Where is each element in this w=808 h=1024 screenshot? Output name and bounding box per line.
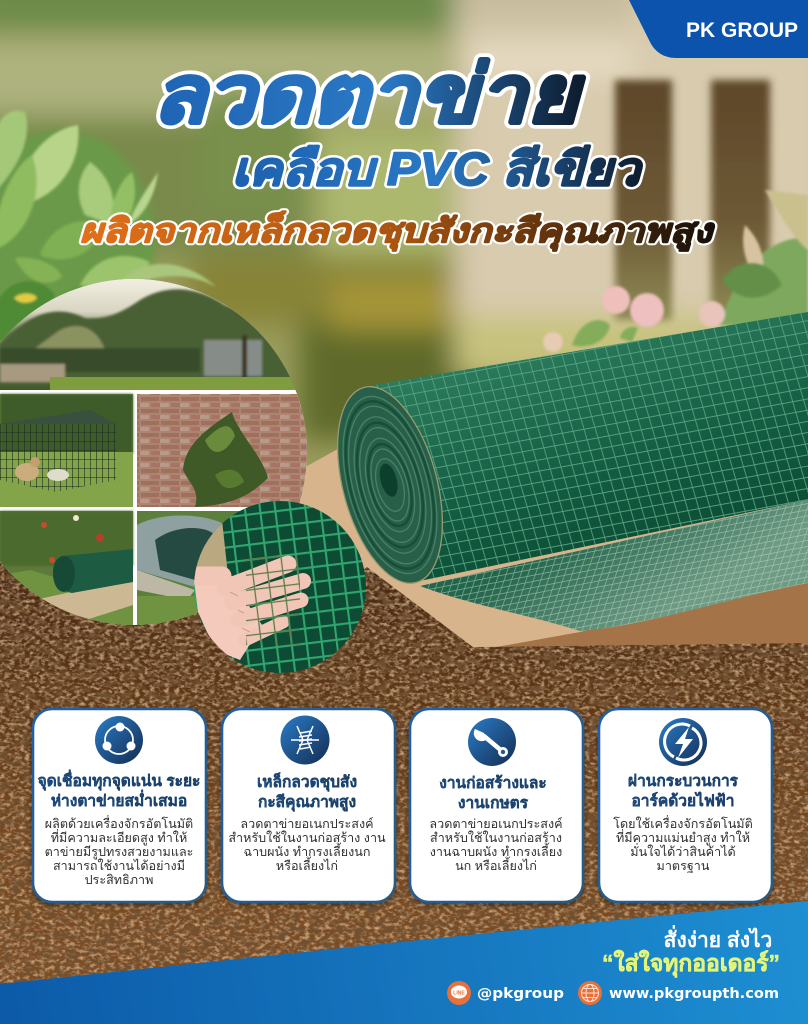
wooden table under roll <box>300 420 808 650</box>
soil ground <box>0 560 808 1024</box>
icon: three linked nodes <box>95 716 143 764</box>
website: www.pkgroupth.com <box>609 986 779 1002</box>
green mesh roll <box>318 312 808 631</box>
brand tab: PK GROUP: PK GROUP <box>686 18 798 42</box>
slogan highlight: “ใส่ใจทุกออเดอร์” <box>602 949 780 978</box>
photo collage circle <box>0 275 325 635</box>
body text: สามารถใช้งานได้อย่างมี <box>53 859 185 873</box>
heading: ผ่านกระบวนการ <box>628 773 739 790</box>
footer blue band <box>0 901 808 1024</box>
icon: line <box>447 981 471 1005</box>
icon: wrench <box>468 718 516 766</box>
body text: งานฉาบผนัง ทำกรงเลี้ยง <box>430 842 562 859</box>
heading: งานก่อสร้างและ <box>439 774 547 792</box>
photo: hand holding green mesh <box>190 498 372 678</box>
title line 2: เคลือบ PVC สีเขียว <box>232 143 643 195</box>
title <box>80 50 715 252</box>
rolled out mesh sheet <box>420 500 808 631</box>
roll spiral end <box>318 375 462 595</box>
body text: ลวดตาข่ายอเนกประสงค์ <box>429 817 563 831</box>
heading: งานเกษตร <box>458 795 529 812</box>
icon: line: LINE <box>453 990 465 996</box>
body text: ที่มีความแม่นยำสูง ทำให้ <box>616 829 750 846</box>
heading: กะสีคุณภาพสูง <box>258 793 356 813</box>
background: blurred garden and house <box>0 0 808 700</box>
card 4: electric arc process <box>599 709 772 902</box>
card 3: construction and farming <box>410 709 583 902</box>
body text: ที่มีความละเอียดสูง ทำให้ <box>51 829 187 846</box>
photo: garden pond with stones <box>137 511 240 625</box>
line handle: @pkgroup <box>477 986 564 1002</box>
title line 1: ลวดตาข่าย <box>152 50 585 139</box>
decorative foliage and flowers right <box>543 190 808 352</box>
card 2: galvanized wire <box>222 709 395 902</box>
subtitle: ผลิตจากเหล็กลวดชุบสังกะสีคุณภาพสูง <box>80 210 715 252</box>
body text: โดยใช้เครื่องจักรอัตโนมัติ <box>613 815 753 831</box>
photo: garden and shed <box>0 278 310 390</box>
photo: garden bed with green roll on pallet <box>0 511 133 625</box>
photo: brick wall with climbing plant <box>137 394 309 507</box>
heading: จุดเชื่อมทุกจุดแน่น ระยะ <box>38 769 200 791</box>
slogan: สั่งง่าย ส่งไว <box>664 924 772 952</box>
icon: lightning bolt <box>659 718 707 766</box>
subtitle: ผลิตจากเหล็กลวดชุบสังกะสีคุณภาพสูง <box>80 210 715 252</box>
body text: ผลิตด้วยเครื่องจักรอัตโนมัติ <box>45 815 193 831</box>
body text: มาตรฐาน <box>657 859 710 873</box>
body text: มั่นใจได้ว่าสินค้าได้ <box>630 843 736 859</box>
body text: ประสิทธิภาพ <box>85 873 153 887</box>
title line 2: เคลือบ PVC สีเขียว <box>232 143 643 195</box>
body text: สำหรับใช้ในงานก่อสร้าง <box>430 831 562 845</box>
hand <box>194 564 303 660</box>
heading: เหล็กลวดชุบสัง <box>257 771 357 792</box>
body text: หรือเลี้ยงไก่ <box>276 856 338 873</box>
heading: ห่างตาข่ายสม่ำเสมอ <box>51 789 187 810</box>
roll body <box>363 312 808 583</box>
body text: ตาข่ายมีรูปทรงสวยงามและ <box>45 845 193 860</box>
icon: barbed wire <box>280 716 330 764</box>
body text: ลวดตาข่ายอเนกประสงค์ <box>240 817 374 831</box>
card 1: welded joints <box>33 709 206 902</box>
decorative foliage left <box>0 111 216 350</box>
photo: dog and rabbit in green fence run <box>0 394 133 507</box>
brand tab: PK GROUP <box>629 0 808 58</box>
title line 1: ลวดตาข่าย <box>152 50 585 139</box>
body text: ฉาบผนัง ทำกรงเลี้ยงนก <box>244 842 370 859</box>
body text: นก หรือเลี้ยงไก่ <box>455 856 537 873</box>
body text: สำหรับใช้ในงานก่อสร้าง งาน <box>228 831 386 845</box>
icon: globe <box>578 981 602 1005</box>
heading: อาร์คด้วยไฟฟ้า <box>631 791 735 810</box>
